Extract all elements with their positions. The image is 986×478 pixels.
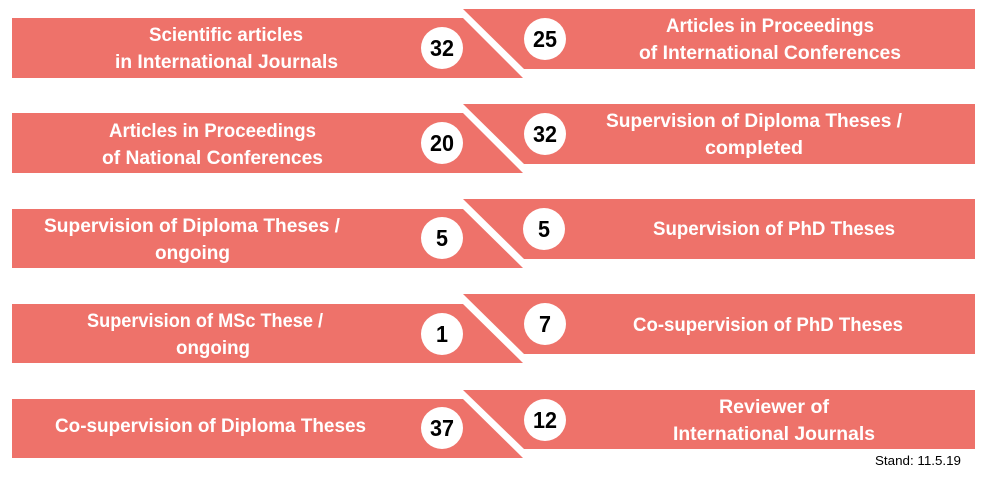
banner: Supervision of MSc These ongoing: Supervision of MSc These / (87, 310, 324, 332)
banner: Supervision of MSc These ongoing: ongoing (176, 337, 250, 359)
banner: Co-supervision of Diploma Theses: 37 (430, 415, 454, 441)
banner: Co-supervision of Diploma Theses (12, 399, 523, 458)
banner: Articles in Proceedings of National Conferences: Articles in Proceedings (109, 120, 316, 142)
banner: Articles in Proceedings of International Conferences: Articles in Proceedings (666, 15, 874, 37)
banner: Articles in Proceedings of National Conferences: of National Conferences (102, 147, 323, 169)
banner: Reviewer of International Journals (463, 390, 975, 449)
banner: Supervision of Diploma Theses completed (463, 104, 975, 164)
banner: Reviewer of International Journals: 12 (533, 407, 557, 433)
banner: Supervision of PhD Theses: 5 (538, 216, 550, 242)
banner: Supervision of Diploma Theses completed: completed (705, 137, 803, 159)
banner: Co-supervision of PhD Theses: 7 (539, 311, 551, 337)
banner: Supervision of MSc These ongoing (12, 304, 523, 363)
banner: Articles in Proceedings of International Conferences: 25 (533, 26, 557, 52)
banner: Scientific articles in International Journals: Scientific articles (149, 24, 303, 46)
banner: Articles in Proceedings of National Conferences (12, 113, 523, 173)
date note: Stand: 11.5.19 (875, 454, 961, 468)
banner: Supervision of PhD Theses (463, 199, 975, 259)
banner: Supervision of Diploma Theses ongoing: 5 (436, 225, 448, 251)
banner: Scientific articles in International Journals: 32 (430, 35, 454, 61)
banner: Scientific articles in International Journals (12, 18, 523, 78)
banner: Co-supervision of PhD Theses: Co-supervision of PhD Theses (633, 314, 903, 336)
banner: Reviewer of International Journals: Reviewer of (719, 396, 829, 418)
banner: Supervision of MSc These ongoing: 1 (436, 321, 448, 347)
banner: Co-supervision of PhD Theses (463, 294, 975, 354)
banner: Articles in Proceedings of International Conferences (463, 9, 975, 69)
banner: Supervision of Diploma Theses completed: Supervision of Diploma Theses / (606, 110, 903, 132)
banner: Supervision of PhD Theses: Supervision of PhD Theses (653, 218, 895, 240)
banner: Articles in Proceedings of National Conferences: 20 (430, 130, 454, 156)
banner: Reviewer of International Journals: International Journals (673, 423, 875, 445)
banner: Scientific articles in International Journals: in International Journals (115, 51, 338, 73)
banner: Supervision of Diploma Theses completed: 32 (533, 121, 557, 147)
banner: Supervision of Diploma Theses ongoing: Supervision of Diploma Theses / (44, 215, 341, 237)
banner: Supervision of Diploma Theses ongoing (12, 209, 523, 268)
banner: Articles in Proceedings of International Conferences: of International Conferences (639, 42, 901, 64)
banner: Co-supervision of Diploma Theses: Co-supervision of Diploma Theses (55, 415, 366, 437)
banner: Supervision of Diploma Theses ongoing: ongoing (155, 242, 230, 264)
